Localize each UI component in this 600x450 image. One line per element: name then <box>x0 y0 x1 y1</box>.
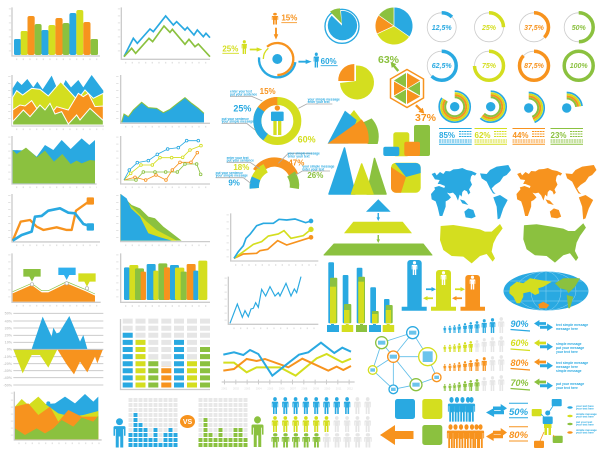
semicircle gauge with four segments: enter your text <box>302 167 325 171</box>
donut chart with person: your simple message <box>222 120 254 124</box>
area chart: positive and negative percentages: -20% <box>3 362 13 366</box>
versus comparison: blue dot grid <box>114 397 176 448</box>
people row 70%: your text here <box>556 386 578 390</box>
person with speech bubbles and legend: put your text <box>576 420 592 424</box>
donut chart with person: 15% <box>260 87 276 96</box>
line chart: three crossing series: 2009 <box>313 386 319 390</box>
line chart: two zig-zag lines <box>119 7 210 63</box>
people row 60% <box>443 336 584 354</box>
area chart: positive and negative percentages: -10% <box>3 355 13 359</box>
line chart: jagged blue <box>226 277 318 328</box>
pie chart: yellow with orange quarter <box>338 64 374 99</box>
mountain chart <box>328 110 379 144</box>
semicircle gauge with four segments: enter your text <box>227 156 250 160</box>
people row 60%: your text here <box>556 350 578 354</box>
stacked area chart: bottom left <box>12 392 102 443</box>
line chart: three crossing series <box>221 343 355 390</box>
concentric progress rings <box>439 91 582 124</box>
area chart: blue and green <box>9 136 97 187</box>
rounded block columns <box>383 125 430 156</box>
person with speech bubbles and legend: your text here <box>576 422 594 426</box>
world map: orange <box>516 165 596 219</box>
donut chart with person: 25% <box>233 103 251 113</box>
person with speech bubbles and legend: your text here <box>576 414 594 418</box>
percentage label: 44%: 44% <box>512 131 529 140</box>
line chart: three crossing series: 2002 <box>233 386 239 390</box>
rounded square with three colours <box>391 163 421 193</box>
area chart: positive and negative percentages: -50% <box>3 383 13 387</box>
50% and 80% labels with arrows <box>486 403 529 441</box>
donut chart with person: put your sentence <box>222 117 249 121</box>
ring diagram with three people and percentages: 25% <box>222 45 238 54</box>
donut chart with person: your simple message <box>308 97 340 101</box>
people row 80%: message here <box>556 365 578 369</box>
coloured rings: 12,5% to 50% <box>427 13 593 42</box>
area chart: positive and negative percentages: 0% <box>7 348 13 352</box>
area chart: positive and negative percentages <box>3 312 103 387</box>
person with speech bubbles and legend <box>532 399 597 448</box>
ring diagram with three people and percentages: 15% <box>281 14 297 23</box>
area chart with callout markers <box>9 253 101 306</box>
pedestals with people and arrows <box>402 260 485 311</box>
semicircle gauge with four segments: put your sentence <box>227 159 254 163</box>
percentage label: 44% <box>512 128 545 144</box>
stacked area chart <box>9 75 104 129</box>
line chart: three crossing series: 2004 <box>256 386 262 390</box>
people row 90%: text simple message <box>556 323 588 327</box>
line chart: rising, three series <box>228 213 318 265</box>
grouped bar chart with labels <box>327 262 394 332</box>
line chart: three crossing series: 2001 <box>221 386 228 390</box>
coloured rings: 62,5% to 100%: 75% <box>482 63 497 70</box>
bar chart: overlapping rounded bars <box>117 253 210 306</box>
people row 80%: 80% <box>510 358 529 368</box>
donut chart with person: enter your text <box>230 90 253 94</box>
semicircle gauge with four segments: 9% <box>228 179 240 188</box>
semicircle gauge with four segments: put your sentence <box>216 171 243 175</box>
coloured rings: 12,5% to 50%: 50% <box>572 25 586 32</box>
coloured rings: 62,5% to 100%: 87,5% <box>524 63 545 70</box>
coloured squares and orange arrow <box>380 399 442 445</box>
people row 60%: 60% <box>510 338 529 348</box>
people row 80%: simple message <box>556 369 582 373</box>
versus badge: VS <box>183 419 192 426</box>
people row 80% <box>443 355 588 373</box>
bar chart: twelve rounded bars <box>10 7 100 59</box>
percentage label: 23% <box>550 128 583 144</box>
donut chart with person <box>222 87 340 149</box>
line chart: three crossing series: 2006 <box>279 386 285 390</box>
semicircle gauge with four segments: 18% <box>233 163 249 172</box>
people row 70% <box>443 375 584 391</box>
coloured rings: 12,5% to 50%: 37,5% <box>524 25 545 32</box>
people row 80%: text simple message <box>556 361 588 365</box>
donut chart with person: 60% <box>298 135 316 145</box>
area chart: positive and negative percentages: -30% <box>3 369 13 373</box>
network diagram <box>368 327 441 394</box>
percentage label: 62% <box>474 128 507 144</box>
coloured rings: 12,5% to 50%: 12,5% <box>432 25 452 32</box>
percentage label: 85%: 85% <box>439 131 455 140</box>
triangle chart <box>329 148 386 194</box>
people row 90%: message here <box>556 327 578 331</box>
people row 70%: put your message <box>556 382 584 386</box>
hexagon chart with 63% and 37%: 37% <box>415 112 437 124</box>
50% and 80% labels with arrows: 50% <box>509 407 529 418</box>
area chart: positive and negative percentages: 40% <box>5 319 13 323</box>
hexagon chart with 63% and 37%: 63% <box>378 54 400 66</box>
area chart: descending layers <box>117 194 210 245</box>
semicircle gauge with four segments: your simple message <box>288 152 320 156</box>
line chart: three crossing series: 2007 <box>290 386 296 390</box>
people row 70%: 70% <box>510 378 529 388</box>
percentage label: 85% <box>439 128 472 144</box>
versus badge <box>180 415 195 428</box>
line chart: three crossing series: 2008 <box>301 386 308 390</box>
versus comparison: green dot grid <box>200 397 264 447</box>
map of USA: yellow <box>440 224 503 263</box>
semicircle gauge with four segments: enter your text <box>288 154 311 158</box>
person with speech bubbles and legend: simple message <box>576 428 597 432</box>
people row 60%: simple message <box>556 342 582 346</box>
percentage label: 62%: 62% <box>474 131 491 140</box>
semicircle gauge with four segments: your simple message <box>302 165 335 169</box>
pyramid in three tiers <box>324 199 432 255</box>
area chart: positive and negative percentages: -40% <box>3 376 13 380</box>
block column chart <box>120 317 210 390</box>
line chart: three crossing series: 2005 <box>267 386 274 390</box>
hexagon chart with 63% and 37% <box>378 54 437 124</box>
coloured rings: 62,5% to 100% <box>427 51 593 80</box>
semicircle gauge with four segments: your simple message <box>216 174 248 178</box>
person with speech bubbles and legend: your text here <box>576 406 594 410</box>
area chart: positive and negative percentages: 10% <box>5 341 13 345</box>
pie chart: four coloured slices <box>375 7 413 45</box>
area chart: blue mountains <box>117 75 210 127</box>
people row 90% <box>443 317 588 333</box>
area chart: positive and negative percentages: 30% <box>5 326 13 330</box>
semicircle gauge with four segments <box>216 152 335 188</box>
coloured rings: 62,5% to 100%: 100% <box>570 63 588 70</box>
area chart: positive and negative percentages: 50% <box>5 312 13 316</box>
line chart with circular markers <box>117 136 210 187</box>
blue and orange crowds <box>447 397 484 448</box>
map of USA: green <box>523 223 586 263</box>
line chart: three crossing series: 2011 <box>336 386 342 390</box>
percentage label: 23%: 23% <box>550 131 567 140</box>
line chart: three crossing series: 2012 <box>347 386 353 390</box>
pie chart: blue with green slice <box>325 8 359 43</box>
ring diagram with three people and percentages: 60% <box>321 57 337 66</box>
person with speech bubbles and legend: your text here <box>576 404 594 408</box>
coloured rings: 12,5% to 50%: 25% <box>481 25 497 32</box>
pictogram rows: blue, yellow, green <box>271 397 372 448</box>
line chart: three crossing series: 2010 <box>324 386 331 390</box>
ring diagram with three people and percentages <box>222 13 338 82</box>
globe <box>504 272 588 310</box>
50% and 80% labels with arrows: 80% <box>509 430 529 441</box>
ribbon line chart with end boxes <box>9 194 100 245</box>
semicircle gauge with four segments: 47% <box>288 158 304 167</box>
area chart: positive and negative percentages: 20% <box>5 334 13 338</box>
coloured rings: 62,5% to 100%: 62,5% <box>432 63 452 70</box>
people row 90%: 90% <box>510 319 529 329</box>
world map: blue <box>431 165 511 219</box>
person with speech bubbles and legend: simple message <box>576 412 597 416</box>
donut chart with person: enter your text <box>308 100 331 104</box>
donut chart with person: put your sentence <box>230 92 257 96</box>
semicircle gauge with four segments: 26% <box>307 171 323 180</box>
line chart: three crossing series: 2003 <box>244 386 251 390</box>
person with speech bubbles and legend: your text here <box>576 430 594 434</box>
people row 60%: put your message <box>556 346 584 350</box>
